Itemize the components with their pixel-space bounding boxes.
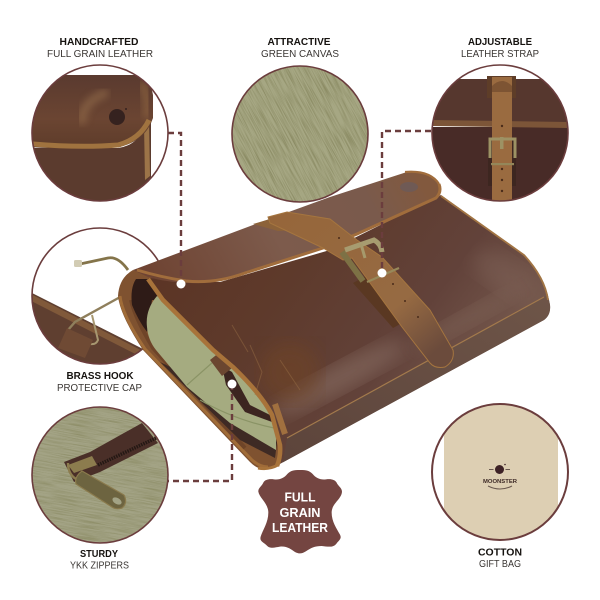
back panel edge	[118, 270, 285, 469]
label: brass hook protective cap: BRASS HOOK	[66, 370, 134, 382]
label: cotton gift bag: GIFT BAG	[479, 558, 521, 570]
circle: handcrafted leather close-up	[30, 65, 168, 205]
label: attractive green canvas: GREEN CANVAS	[261, 48, 339, 60]
flap	[430, 79, 570, 124]
front tan edge	[148, 279, 280, 466]
interior shadow	[160, 362, 280, 458]
moonster logo: MOONSTER	[483, 479, 518, 485]
strap keeper	[353, 276, 402, 328]
label: attractive green canvas	[261, 36, 339, 60]
label: sturdy ykk zippers: STURDY	[80, 548, 118, 560]
circle: YKK zipper close-up	[31, 406, 169, 544]
leather flap	[133, 171, 440, 283]
label: brass hook protective cap	[57, 370, 142, 394]
circle: green canvas texture	[231, 65, 369, 203]
label: adjustable leather strap: ADJUSTABLE	[468, 36, 532, 48]
zipper slider	[68, 456, 97, 473]
interior mesh	[132, 279, 165, 332]
front panel	[148, 195, 550, 465]
label: adjustable leather strap: LEATHER STRAP	[461, 48, 539, 60]
stitching	[287, 297, 544, 438]
lower panel	[430, 127, 570, 205]
label: attractive green canvas: ATTRACTIVE	[268, 36, 330, 48]
label: sturdy ykk zippers: YKK ZIPPERS	[70, 560, 129, 572]
label: cotton gift bag	[478, 546, 522, 570]
badge: full grain leather: LEATHER	[272, 521, 328, 535]
leather crease marks	[232, 325, 300, 395]
flap snap	[400, 182, 418, 192]
leather band	[32, 294, 142, 364]
badge: full grain leather	[258, 470, 342, 553]
brass buckle	[342, 252, 363, 281]
lower band	[282, 296, 552, 468]
label: cotton gift bag: COTTON	[478, 546, 522, 558]
green canvas lining	[147, 296, 276, 450]
label: sturdy ykk zippers	[70, 548, 129, 572]
lower leather panel	[34, 123, 151, 200]
leather flap	[30, 75, 153, 148]
connector: adjustable strap callout line	[378, 131, 431, 278]
protective cap	[74, 260, 82, 267]
hook wire	[68, 296, 122, 330]
moonster logo	[483, 464, 518, 489]
badge: full grain leather: GRAIN	[280, 506, 320, 520]
body shading	[270, 255, 550, 462]
strap loop	[253, 219, 300, 231]
label: handcrafted full grain leather	[47, 36, 153, 60]
badge: full grain leather: FULL	[284, 490, 316, 504]
leather bag	[118, 171, 552, 469]
zipper tape	[64, 423, 158, 482]
snap button	[109, 109, 125, 125]
zipper pocket	[222, 366, 272, 422]
label: brass hook protective cap: PROTECTIVE CAP	[57, 382, 142, 394]
right edge highlight	[441, 196, 548, 300]
circle: brass hook close-up	[30, 228, 168, 370]
label: handcrafted full grain leather: HANDCRAFTED	[60, 36, 139, 48]
strap	[492, 77, 512, 202]
connector: zipper callout line	[168, 380, 236, 481]
circle: cotton gift bag	[432, 400, 568, 545]
label: adjustable leather strap	[461, 36, 539, 60]
flap edge	[137, 184, 440, 282]
leather strap	[268, 212, 453, 368]
connector: handcrafted callout line	[168, 133, 186, 288]
leather tab	[58, 328, 93, 358]
circle: adjustable leather strap close-up	[430, 65, 570, 205]
triangle wire	[90, 315, 98, 344]
label: handcrafted full grain leather: FULL GRAIN LEATHER	[47, 48, 153, 60]
keeper loop	[487, 76, 516, 79]
buckle	[490, 139, 515, 158]
zipper pull	[76, 471, 126, 509]
